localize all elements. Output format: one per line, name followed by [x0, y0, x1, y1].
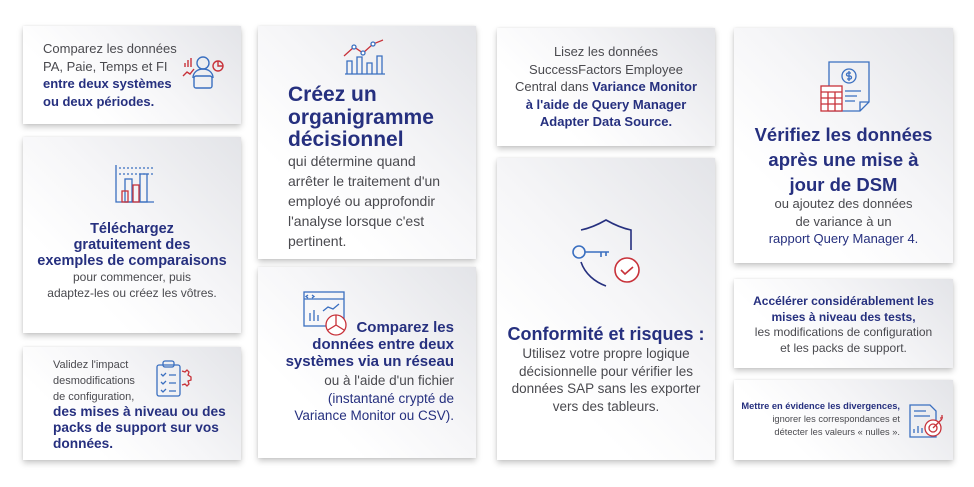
- text: conformité description: vers des tableurs.: [553, 398, 659, 414]
- text: télécharger description: adaptez-les ou créez les vôtres.: [47, 286, 217, 300]
- icon: shield with key and check: [572, 219, 640, 287]
- text: validez intro: desmodifications: [53, 375, 135, 387]
- panel: organigramme décisionnel: [258, 26, 476, 259]
- text: comparez réseau title: [286, 319, 454, 370]
- text: divergences: Mettre en évidence les divergences,: [741, 401, 900, 411]
- text: lisez successfactors: SuccessFactors Employee: [529, 62, 683, 76]
- text: télécharger title: Téléchargez: [90, 221, 174, 237]
- icon: line and bar chart: [344, 39, 385, 75]
- text: conformité description: Utilisez votre propre logique: [522, 346, 690, 361]
- text: conformité title: Conformité et risques :: [507, 324, 705, 344]
- text: divergences: ignorer les correspondances et: [772, 414, 900, 424]
- text: validez highlight: des mises à niveau ou des: [53, 404, 226, 419]
- text: divergences: [741, 401, 900, 437]
- text: organigramme title: décisionnel: [288, 128, 404, 151]
- text: accélérer: les modifications de configuration: [755, 325, 932, 339]
- text: accélérer: Accélérer considérablement les: [753, 294, 934, 308]
- text: comparez réseau description: [294, 373, 454, 423]
- text: télécharger title: exemples de comparaisons: [37, 253, 227, 269]
- text: lisez successfactors: Lisez les données: [554, 44, 658, 59]
- panel: conformité et risques: [497, 158, 715, 460]
- text: divergences: détecter les valeurs « nulles ».: [774, 427, 900, 437]
- text: conformité description: données SAP sans les exporter: [512, 381, 700, 396]
- text: compare data: [43, 41, 177, 108]
- icon: browser window with pie: [303, 291, 347, 336]
- text: lisez successfactors: Central dans Variance Monitor: [515, 79, 697, 94]
- text: validez highlight: [53, 404, 226, 451]
- text: organigramme description: arrêter le traitement d'un: [288, 173, 440, 189]
- icon: invoice with calculator: [820, 61, 870, 112]
- text: accélérer: [753, 294, 934, 354]
- text: vérifiez title: après une mise à: [768, 149, 919, 170]
- panel: accélérer tests: [734, 279, 953, 368]
- text: validez intro: [53, 359, 135, 403]
- text: conformité description: décisionnelle pour vérifier les: [519, 364, 693, 378]
- text: comparez réseau description: Variance Monitor ou CSV).: [294, 408, 454, 423]
- icon: clipboard with gear: [156, 360, 192, 397]
- text: validez highlight: données.: [53, 436, 113, 451]
- text: validez highlight: packs de support sur vos: [53, 420, 219, 435]
- text: vérifiez description: ou ajoutez des données: [774, 196, 913, 211]
- panel: lisez SuccessFactors: [497, 28, 715, 146]
- text: comparez réseau title: Comparez les: [356, 319, 454, 336]
- text: vérifiez description: [769, 196, 918, 246]
- text: comparez réseau title: données entre deux: [312, 336, 454, 353]
- text: vérifiez title: [754, 124, 932, 195]
- text: organigramme title: Créez un: [288, 83, 377, 106]
- text: télécharger title: [37, 221, 227, 269]
- text: organigramme description: l'analyse lorsque c'est: [288, 213, 424, 229]
- text: compare data: ou deux périodes.: [43, 94, 154, 108]
- text: organigramme description: employé ou approfondir: [288, 193, 435, 209]
- icon: bar chart: [115, 165, 154, 203]
- text: organigramme title: organigramme: [288, 106, 434, 128]
- text: organigramme title: [288, 83, 434, 151]
- panel: validez impact: [23, 347, 241, 460]
- text: comparez réseau description: ou à l'aide d'un fichier: [324, 373, 454, 388]
- panel: vérifiez après DSM: [734, 28, 953, 263]
- icon: document with target: [909, 404, 943, 438]
- panel: comparez via réseau: [258, 267, 476, 458]
- text: accélérer: et les packs de support.: [780, 340, 907, 354]
- text: vérifiez title: jour de DSM: [790, 174, 897, 195]
- text: compare data: entre deux systèmes: [43, 76, 172, 91]
- text: comparez réseau title: systèmes via un réseau: [286, 353, 454, 370]
- panel: divergences: [734, 380, 953, 460]
- text: lisez successfactors: [515, 44, 697, 129]
- text: télécharger title: gratuitement des: [74, 237, 190, 253]
- text: validez intro: de configuration,: [53, 391, 134, 403]
- text: conformité description: [512, 346, 700, 414]
- text: lisez successfactors: Adapter Data Source.: [540, 114, 672, 129]
- text: comparez réseau description: (instantané crypté de: [328, 390, 454, 406]
- panel: compare PA Paie: [23, 26, 241, 124]
- icon: person with laptop: [182, 56, 224, 89]
- text: vérifiez description: rapport Query Manager 4.: [769, 231, 918, 246]
- panel: télécharger exemples: [23, 137, 241, 333]
- text: compare data: Comparez les données: [43, 41, 177, 56]
- text: validez intro: Validez l'impact: [53, 359, 128, 371]
- text: vérifiez description: de variance à un: [795, 214, 892, 228]
- text: organigramme description: [288, 153, 440, 249]
- text: vérifiez title: Vérifiez les données: [755, 124, 932, 145]
- text: compare data: PA, Paie, Temps et FI: [43, 58, 168, 74]
- text: organigramme description: pertinent.: [288, 233, 346, 249]
- text: lisez successfactors: à l'aide de Query Manager: [526, 96, 686, 112]
- text: télécharger description: pour commencer, puis: [73, 270, 191, 284]
- text: télécharger description: [47, 270, 217, 300]
- text: organigramme description: qui détermine quand: [288, 153, 416, 169]
- text: accélérer: mises à niveau des tests,: [771, 310, 916, 324]
